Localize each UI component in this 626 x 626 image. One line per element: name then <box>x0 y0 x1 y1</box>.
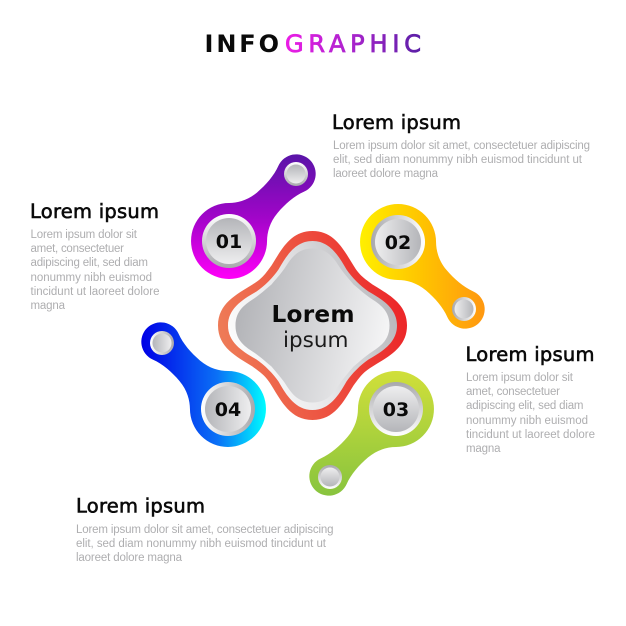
step 02 connector <box>344 188 506 350</box>
small disc 03 <box>318 465 342 489</box>
text block: bottom left: Lorem ipsum <box>76 494 205 518</box>
text block: top right: elit, sed diam nonummy nibh euismod tincidunt ut <box>333 154 583 166</box>
title <box>204 30 421 58</box>
title: GRAPHIC <box>285 30 421 58</box>
text block: left: Lorem ipsum <box>30 200 159 223</box>
text block: bottom left: elit, sed diam nonummy nibh euismod tincidunt ut <box>76 538 327 550</box>
number badge 01: 01 <box>216 231 242 253</box>
text block: bottom left: Lorem ipsum dolor sit amet, consectetuer adipiscing <box>76 524 334 536</box>
number badge 03: 03 <box>383 399 409 421</box>
number badge 04: 04 <box>215 399 241 421</box>
text block: bottom left: laoreet dolore magna <box>76 552 183 564</box>
step 03 connector <box>288 355 450 517</box>
text block: right <box>466 343 595 455</box>
title: INFO <box>204 30 279 58</box>
text block: right: magna <box>466 443 501 455</box>
central label <box>272 301 354 353</box>
text block: left: nonummy nibh euismod <box>30 272 152 284</box>
number badge 01 <box>202 214 256 268</box>
yellow pin shape <box>344 188 506 350</box>
text block: left: magna <box>30 300 66 312</box>
text block: top right: Lorem ipsum <box>332 111 461 134</box>
text block: left: amet, consectetuer <box>30 243 124 255</box>
text block: left: Lorem ipsum dolor sit <box>30 229 138 241</box>
text block: top right: Lorem ipsum dolor sit amet, consectetuer adipiscing <box>333 140 590 152</box>
text block: left: adipiscing elit, sed diam <box>30 257 148 269</box>
text block: right: tincidunt ut laoreet dolore <box>466 429 595 441</box>
purple pin shape <box>175 133 337 295</box>
text block: left: tincidunt ut laoreet dolore <box>30 286 160 298</box>
text block: bottom left <box>76 494 334 564</box>
small disc 04 <box>150 331 174 355</box>
text block: right: adipiscing elit, sed diam <box>466 400 584 412</box>
green pin shape <box>288 355 450 517</box>
small disc 01 <box>284 162 308 186</box>
text block: right: nonummy nibh euismod <box>466 415 588 427</box>
text block: top right: laoreet dolore magna <box>333 168 439 180</box>
number badge 02 <box>371 215 425 269</box>
central label: ipsum <box>283 328 348 353</box>
number badge 02: 02 <box>385 232 411 254</box>
number badge 04 <box>201 382 255 436</box>
text block: top right <box>332 111 590 180</box>
text block: right: Lorem ipsum <box>466 343 594 366</box>
text block: right: amet, consectetuer <box>466 386 560 398</box>
text block: right: Lorem ipsum dolor sit <box>466 372 574 384</box>
text block: left <box>30 200 160 312</box>
step 04 connector <box>120 301 282 463</box>
step 01 connector <box>175 133 337 295</box>
number badge 03 <box>369 382 423 436</box>
blue pin shape <box>120 301 282 463</box>
central shape <box>218 231 407 420</box>
central label: Lorem <box>272 301 354 328</box>
small disc 02 <box>452 297 476 321</box>
